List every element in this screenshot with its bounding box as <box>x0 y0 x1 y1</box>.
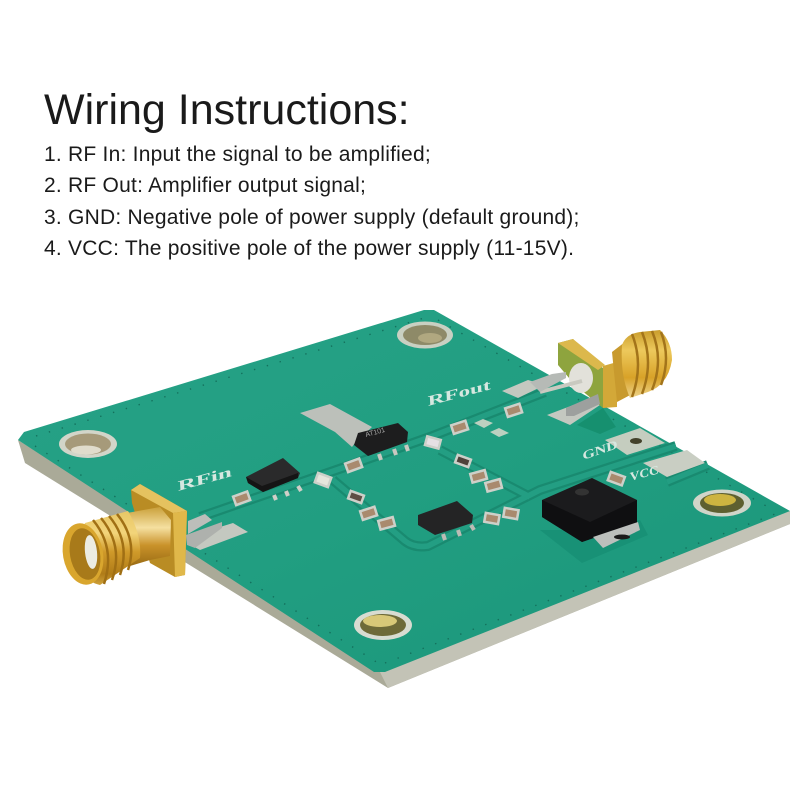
trace gaps <box>200 392 708 546</box>
mounting hole: bottom <box>354 610 412 640</box>
solder pad: RF out ground <box>547 396 600 425</box>
chip: top transistor: AT101 <box>365 427 386 439</box>
insulator <box>569 363 593 393</box>
board top surface <box>18 310 790 672</box>
text block: wiring list: 3. GND: Negative pole of power supply (default ground); <box>44 206 580 229</box>
via dots <box>35 318 775 663</box>
title: Wiring Instructions: <box>44 86 410 134</box>
flange front <box>173 511 187 577</box>
trace copper <box>200 392 708 546</box>
thread <box>72 511 140 585</box>
text block: wiring list: 2. RF Out: Amplifier output signal; <box>44 174 366 197</box>
chip: lower transistor <box>418 501 474 540</box>
barrel <box>612 335 634 402</box>
solder pad: RF in ground <box>187 523 248 550</box>
capacitors <box>233 404 625 530</box>
small test pads <box>474 419 509 437</box>
mounting hole: left <box>59 430 117 458</box>
chip: left transistor <box>246 458 301 500</box>
solder <box>188 514 212 534</box>
chip: power regulator <box>542 478 640 548</box>
label: GND: GND <box>582 437 619 463</box>
mounting hole: top <box>397 322 453 348</box>
chip: top transistor <box>354 423 408 460</box>
shadow under right connector <box>577 408 616 434</box>
solder pad: VCC <box>643 450 705 477</box>
solder <box>530 372 566 392</box>
shadow under regulator <box>540 520 648 563</box>
connector: left SMA <box>58 484 222 588</box>
flange back <box>558 339 605 408</box>
board labels <box>177 377 659 495</box>
flange front <box>603 362 617 408</box>
label: VCC: VCC <box>629 462 659 484</box>
connector: right SMA <box>530 330 672 416</box>
solder pad: top middle <box>300 404 372 447</box>
thread <box>622 330 672 398</box>
board edge <box>18 440 790 688</box>
solder pad: RF out signal <box>502 380 545 398</box>
solder pad: GND <box>605 428 665 455</box>
text block: wiring list <box>44 143 580 260</box>
mounting hole: right <box>693 490 751 516</box>
text block: wiring list: 4. VCC: The positive pole of the power supply (11-15V). <box>44 237 574 260</box>
flange back <box>131 484 187 577</box>
microstrip traces <box>200 392 708 546</box>
text block: wiring list: 1. RF In: Input the signal to be amplified; <box>44 143 431 166</box>
opening <box>58 520 108 588</box>
flange top <box>131 484 187 513</box>
label: RFout: RFout <box>427 377 491 410</box>
label: RFin: RFin <box>177 464 232 495</box>
pin <box>540 381 582 392</box>
barrel <box>127 507 171 566</box>
